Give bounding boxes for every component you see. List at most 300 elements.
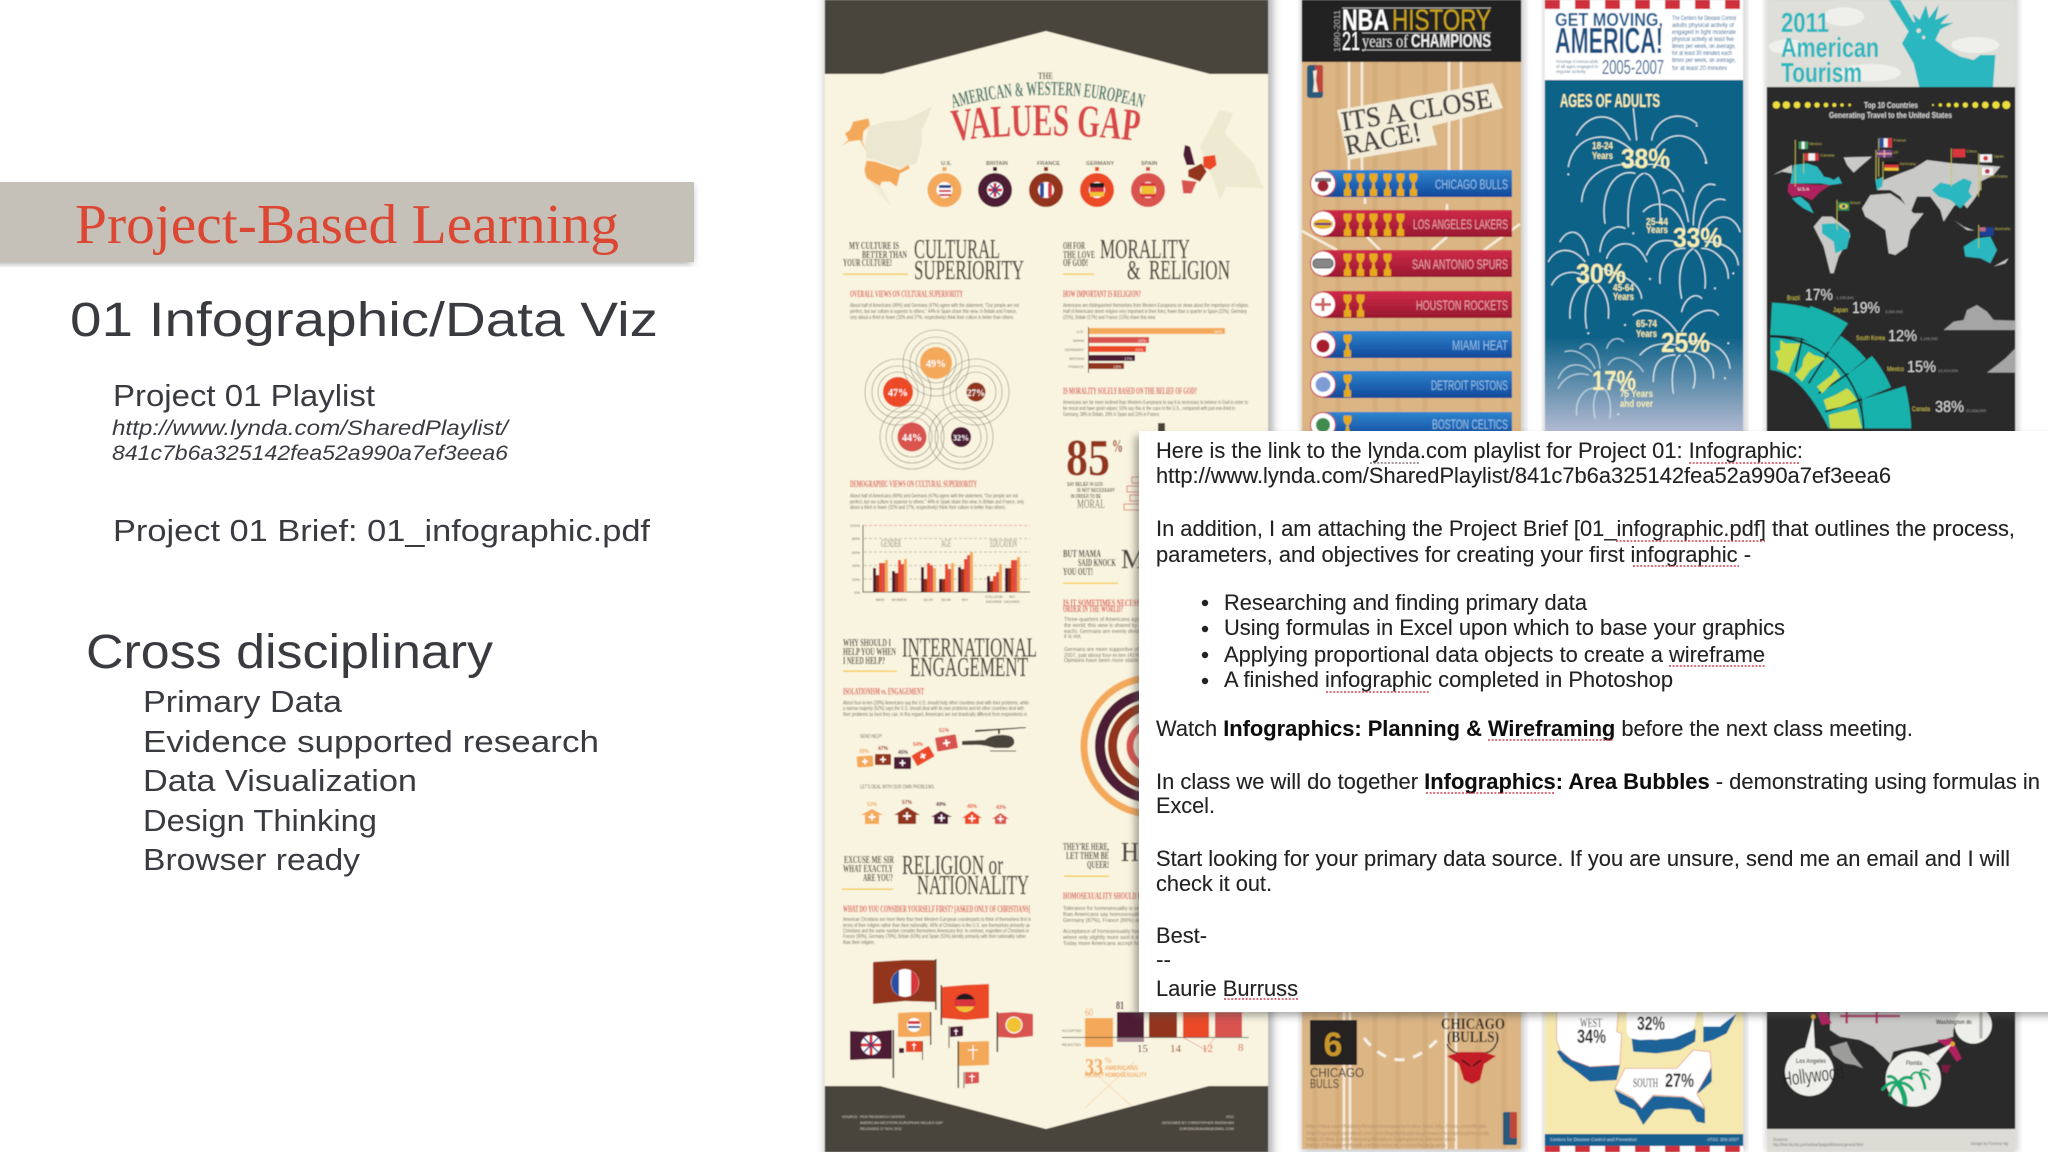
infographic: send help suitcases: 39% <box>859 749 870 755</box>
chart: acceptance bars: ACCEPTED <box>1062 1029 1082 1033</box>
bullet list: Using formulas in Excel upon which to base your graphics <box>1224 615 1785 640</box>
team: Spurs: SAN ANTONIO SPURS <box>1412 256 1508 272</box>
poster header: engaged in light moderate <box>1672 30 1737 36</box>
email text: Excel. <box>1156 793 1215 818</box>
bulls label: (BULLS) <box>1447 1029 1499 1046</box>
flags illustration <box>850 959 1033 1088</box>
poster footer: RELEASED 17 NOV 2011 <box>860 1127 902 1131</box>
section: morality heading: & RELIGION <box>1127 255 1230 285</box>
map labels: Florida <box>1906 1061 1923 1067</box>
chart: demographic bars: 100% <box>850 523 860 528</box>
section: international engagement heading: ENGAGEMENT <box>910 652 1028 682</box>
email text: In addition, I am attaching the Project Brief [01_infographic.pdf] that outlines the process, <box>1156 516 2015 541</box>
map labels <box>1781 1020 1973 1091</box>
text: isolationism: their problems as best they can. In this regard, Americans are not drastically different from respondents in <box>843 712 1027 718</box>
team: Pistons: DETROIT PISTONS <box>1431 377 1508 393</box>
chart: demographic bars: DEGREE <box>1004 600 1020 604</box>
poster header: adults physical activity of <box>1672 23 1734 29</box>
section: homosexuality heading: HO <box>1121 837 1157 867</box>
fireworks background: AGES OF ADULTS <box>1560 91 1660 111</box>
chart: acceptance bars <box>1062 998 1249 1108</box>
stat: ages percentages: 25% <box>1661 327 1710 358</box>
section: moral authority heading <box>1063 544 1164 664</box>
chart: religion importance bars: 22% <box>1138 339 1147 343</box>
poster footer: AMERICAN-WESTERN EUROPEAN VALUES GAP <box>860 1121 943 1125</box>
stat: region percentages: 27% <box>1665 1071 1694 1092</box>
text block: project heading <box>70 294 658 548</box>
section: homosexuality heading: Germany (87%), France (86%) and Britain ( <box>1063 918 1164 924</box>
section: international engagement heading: WHY SHOULD I <box>843 637 891 649</box>
poster header: for at least 30 minutes each <box>1672 51 1732 57</box>
poster header: 2005-2007 <box>1602 57 1664 79</box>
infographic: send help suitcases: 51% <box>939 728 950 734</box>
dots heading: Generating Travel to the United States <box>1829 111 1952 120</box>
chart: demographic bars: About half of Americans (49%) and Germans (47%) agree with the statement, "Our people are not <box>850 494 1018 500</box>
stat: country shares: 1,145,841 <box>1836 295 1855 300</box>
text: what consider first: than their religion. <box>843 940 875 946</box>
text: overall views <box>850 289 1019 321</box>
section: religion or nationality heading: NATIONALITY <box>917 870 1029 900</box>
chart: acceptance bars: 15 <box>1137 1043 1148 1055</box>
chart: demographic bars: 40% <box>852 563 860 568</box>
section: cultural superiority heading: SUPERIORITY <box>914 255 1024 285</box>
stat: ages percentages: 33% <box>1673 222 1722 253</box>
chart: demographic bars: DEMOGRAPHIC VIEWS ON CULTURAL SUPERIORITY <box>850 479 977 489</box>
stat: 85 percent <box>1066 430 1142 511</box>
poster title: Tourism <box>1781 57 1862 88</box>
banner title: Project-Based Learning <box>75 194 619 256</box>
team: Celtics <box>1310 412 1512 439</box>
panel: american tourism poster <box>1767 0 2017 1152</box>
email text: Best- <box>1156 923 1207 948</box>
stat: ages percentages: Years <box>1592 151 1613 162</box>
chart: demographic bars: 80% <box>852 536 860 541</box>
text block: cross disciplinary: Evidence supported research <box>143 724 599 759</box>
text: how important is religion: HOW IMPORTANT IS RELIGION? <box>1063 289 1141 299</box>
chart: religion importance bars: 21% <box>1135 348 1144 352</box>
chart: culture rings: 49% <box>926 359 946 370</box>
text: isolationism: a narrow majority (52%) says the U.S. should deal with its own problems and let other countries deal with <box>843 706 1024 712</box>
infographic: own problems houses: 49% <box>936 802 947 808</box>
USA destinations map <box>1785 1006 1992 1107</box>
email text: http://www.lynda.com/SharedPlaylist/841c7b6a325142fea52a990a7ef3eea6 <box>1156 463 1891 488</box>
team: Pistons <box>1310 371 1512 398</box>
chart: target rings <box>1084 678 1220 814</box>
text block: cross disciplinary <box>86 626 599 877</box>
close race paper note <box>1337 83 1503 162</box>
email text <box>1156 438 2040 1001</box>
fine print: http://sportsillustrated.cnn.com/basketball/nba/news/champions/records <box>1306 1131 1489 1137</box>
fine print <box>1306 1124 1489 1149</box>
stat: 85 percent: IN ORDER TO BE <box>1071 494 1101 500</box>
infographic: send help suitcases <box>857 728 958 769</box>
stat: 85 percent: SAY BELIEF IN GOD <box>1067 482 1103 488</box>
poster footer: CHRISINGRAHAM@GMAIL.COM <box>1179 1127 1234 1131</box>
bulls label <box>1310 1016 1505 1091</box>
infographic: send help suitcases: 54% <box>913 742 924 748</box>
chart: demographic bars: COLLEGE <box>985 595 1003 599</box>
section: moral authority heading: Germans are more supportive of the use of <box>1064 647 1163 653</box>
stat: country shares: South Korea <box>1856 336 1886 342</box>
stat: country shares: 13,414,000 <box>1938 368 1959 373</box>
stat: region percentages: 34% <box>1577 1027 1606 1048</box>
stat: ages percentages: 17% <box>1592 365 1636 396</box>
section: moral authority heading: Three-quarters of Americans agree that it <box>1064 617 1159 623</box>
team: Celtics: BOSTON CELTICS <box>1432 416 1508 432</box>
poster header <box>1545 9 1743 80</box>
fine print: http://nba.com/history/finals/champions/index.html http://nba.com/finals <box>1306 1124 1486 1130</box>
chart: religion importance bars: FRANCE <box>1068 365 1084 369</box>
map: europe <box>1182 110 1263 200</box>
section: homosexuality heading: Acceptance of homosexuality has increased <box>1063 929 1164 935</box>
chart: religion importance bars <box>1065 327 1225 373</box>
stat: country shares <box>1787 287 1987 416</box>
section: homosexuality heading: QUEER! <box>1087 859 1109 871</box>
stat: ages percentages: 38% <box>1621 143 1670 174</box>
text block: project heading: Project 01 Playlist <box>113 378 375 413</box>
world map: France <box>1894 138 1907 143</box>
poster header: for at least 20 minutes <box>1672 66 1727 72</box>
stat: region percentages: WEST <box>1580 1015 1602 1030</box>
section: homosexuality heading <box>1063 837 1164 947</box>
map labels: Washington dc <box>1936 1020 1973 1026</box>
stat: region percentages <box>1577 1014 1694 1092</box>
stat: ages percentages: 25-44 <box>1646 217 1668 228</box>
email text: Laurie Burruss <box>1156 976 1298 1001</box>
world map: Germany <box>1900 161 1916 166</box>
chart: demographic bars: 50+ <box>962 598 969 602</box>
section: moral authority heading: it is not. <box>1064 634 1082 640</box>
poster footer: DESIGNED BY CHRISTOPHER INGRAHAM <box>1162 1121 1234 1125</box>
bullet list: Applying proportional data objects to create a wireframe <box>1224 642 1765 667</box>
world map: Australia <box>1995 226 2011 231</box>
email text: In class we will do together Infographics: Area Bubbles - demonstrating using formulas in <box>1156 769 2040 794</box>
chart: acceptance bars: REJECTED <box>1062 1043 1081 1047</box>
text: overall views: About half of Americans (49%) and Germans (47%) agree with the statement, "Our people are not <box>850 303 1019 309</box>
chart: acceptance bars: % <box>1105 1056 1112 1065</box>
poster title: AMERICAN & WESTERN EUROPEAN <box>952 81 1146 108</box>
section: homosexuality heading: Today more Americans accept homosexual <box>1063 941 1162 947</box>
chart: religion importance bars: BRITAIN <box>1069 357 1084 361</box>
text: isolationism <box>843 686 1029 718</box>
chart: acceptance bars: 12 <box>1202 1043 1213 1055</box>
team: Rockets <box>1310 291 1512 318</box>
infographic: own problems houses: LET'S DEAL WITH OUR OWN PROBLEMS <box>860 784 935 790</box>
email text: Watch Infographics: Planning & Wireframing before the next class meeting. <box>1156 716 1913 741</box>
text: morality belief: Americans are far more inclined than Western Europeans to say it is necessary to believe in God in order to <box>1063 400 1248 406</box>
world map: UK <box>1893 149 1899 154</box>
poster title: 2011 <box>1781 7 1829 38</box>
close race paper note: RACE! <box>1342 117 1424 162</box>
lakers scoreboard <box>1310 1020 1357 1065</box>
team: Spurs <box>1310 250 1512 277</box>
world map: Canada <box>1820 153 1835 158</box>
stat: ages percentages: Years <box>1613 292 1634 303</box>
team: Chicago Bulls <box>1310 170 1512 197</box>
stat: country shares: 12% <box>1888 328 1917 345</box>
poster footer <box>825 1086 1268 1152</box>
text: how important is religion: Half of Americans deem religion very important in their lives; fewer than a quarter in Spain (22%), Germany <box>1063 309 1247 315</box>
section: moral authority heading: SAID KNOCK <box>1078 557 1116 569</box>
text: how important is religion <box>1063 289 1249 321</box>
poster footer: PEW RESEARCH CENTER <box>860 1115 905 1119</box>
poster header: AMERICA! <box>1555 20 1663 61</box>
stat: 85 percent: MORAL <box>1077 496 1105 511</box>
stat: country shares: 17% <box>1805 287 1833 304</box>
world map: South Korea <box>1985 174 2008 179</box>
text: overall views: perfect, but our culture is superior to others." 44% in Spain share this view. In Britain and France, <box>850 309 1017 315</box>
bullet list: A finished infographic completed in Photoshop <box>1224 667 1673 692</box>
panel: NBA history poster <box>1302 0 1524 1152</box>
stat: country shares: Japan <box>1833 308 1848 314</box>
text block: project heading: Project 01 Brief: 01_infographic.pdf <box>113 513 650 548</box>
text block: cross disciplinary: Design Thinking <box>143 803 377 838</box>
stat: ages percentages: 18-24 <box>1592 141 1613 152</box>
text block: cross disciplinary: Primary Data <box>143 684 343 719</box>
text: isolationism: About four-in-ten (39%) Americans say the U.S. should help other countries deal with their problems, while <box>843 700 1029 706</box>
chart: demographic bars: MEN <box>876 598 884 602</box>
poster footer <box>1545 1134 1743 1152</box>
country badges <box>928 161 1165 207</box>
stat: ages percentages <box>1576 141 1722 410</box>
chart: demographic bars: WOMEN <box>892 598 907 602</box>
poster header: times per week, on average, <box>1672 44 1736 50</box>
poster title <box>950 71 1146 142</box>
section: international engagement heading: INTERNATIONAL <box>902 632 1037 662</box>
chart: demographic bars: perfect, but our culture is superior to others." 44% in Spain share this view. In Britain and France, only <box>850 500 1024 506</box>
country badges: GERMANY <box>1086 161 1114 167</box>
chart: religion importance bars: U.S. <box>1077 330 1084 334</box>
section: moral authority heading: ORDER IN THE WORLD? <box>1063 604 1123 614</box>
panel: email message <box>1135 431 2048 1016</box>
lakers scoreboard: 6 <box>1324 1026 1342 1064</box>
section: cultural superiority heading <box>843 234 1024 285</box>
text: how important is religion: (21%), Britain (17%) and France (13%) share this view. <box>1063 315 1156 321</box>
text: morality belief <box>1063 386 1248 432</box>
stat: 85 percent: IS NOT NECESSARY <box>1077 488 1116 494</box>
NBA header: NBA <box>1342 4 1389 37</box>
text: morality belief: IS MORALITY SOLELY BASED ON THE BELIEF OF GOD? <box>1063 386 1197 396</box>
team: Chicago Bulls: CHICAGO BULLS <box>1435 176 1508 192</box>
chart: demographic bars: 18-29 <box>923 598 933 602</box>
NBA header: CHAMPIONS <box>1411 31 1491 51</box>
chart: demographic bars: DEGREE <box>986 600 1002 604</box>
infographic: own problems houses: 57% <box>902 800 913 806</box>
poster footer: Source: <box>1773 1137 1789 1142</box>
text block: project heading: http://www.lynda.com/SharedPlaylist/ <box>112 417 510 440</box>
text: morality belief: Germany, 38% in Britain, 19% in Spain and 15% in France. <box>1063 412 1160 418</box>
email text: check it out. <box>1156 871 1272 896</box>
banner <box>0 182 694 263</box>
map: north america <box>841 107 932 207</box>
section: homosexuality heading: where only slightly more said it should be a <box>1063 935 1162 941</box>
poster title <box>1781 7 1879 88</box>
text: what consider first: France (90%), Germany (70%), Britain (63%) and Spain (53%) identify primarily with their nationality rather <box>843 934 1026 940</box>
world map: U.S.A <box>1798 187 1810 192</box>
chart: culture rings <box>865 330 1009 469</box>
section: morality heading <box>1063 234 1230 285</box>
section: religion or nationality heading: ARE YOU? <box>863 872 893 884</box>
poster footer: ATSC 300-2007 <box>1707 1137 1739 1142</box>
chart: demographic bars <box>850 479 1030 604</box>
section: international engagement heading: I NEED HELP? <box>843 655 885 667</box>
text block: cross disciplinary: Cross disciplinary <box>86 626 493 679</box>
bullet list: Researching and finding primary data <box>1224 590 1587 615</box>
regional map <box>1545 1012 1743 1134</box>
world map: Brazil <box>1850 200 1860 205</box>
stat: country shares: Brazil <box>1787 296 1800 302</box>
chart: religion importance bars: GERMANY <box>1065 348 1084 352</box>
NBA header: 21 <box>1342 26 1360 56</box>
chart: demographic bars: EDUCATION <box>990 536 1017 550</box>
stat: country shares: Mexico <box>1887 367 1905 373</box>
chart: acceptance bars: 8 <box>1238 1042 1244 1054</box>
infographic: send help suitcases: SEND HELP! <box>860 734 882 740</box>
team: Lakers: LOS ANGELES LAKERS <box>1413 216 1508 232</box>
bullet list <box>1202 590 1785 692</box>
section: cultural superiority heading: CULTURAL <box>914 234 1000 264</box>
section: homosexuality heading: LET THEM BE <box>1066 850 1109 862</box>
poster title: VALUES GAP <box>950 104 1141 142</box>
icon: NBA logo <box>1307 65 1323 98</box>
NBA header: years of <box>1362 31 1408 51</box>
text: what consider first <box>843 904 1031 946</box>
world map: China <box>1966 149 1978 154</box>
section: cultural superiority heading: MY CULTURE IS <box>849 240 899 252</box>
text block: cross disciplinary: Browser ready <box>143 842 361 877</box>
section: cultural superiority heading: BETTER THAN <box>862 249 907 261</box>
world map: Mexico <box>1809 141 1822 146</box>
text: morality belief: be moral and have good values; 53% say this is the case in the U.S., compared with just one-third in <box>1063 406 1235 412</box>
team: Heat <box>1310 331 1512 358</box>
stat: ages percentages: 75 Years <box>1620 389 1653 400</box>
court lines <box>1302 62 1520 1149</box>
section: homosexuality heading: THEY'RE HERE, <box>1063 841 1109 853</box>
icon: statue of liberty <box>1889 0 1995 87</box>
text block: project heading: 841c7b6a325142fea52a990a7ef3eea6 <box>112 442 508 465</box>
team: Lakers <box>1310 210 1512 237</box>
stat: country shares: 15% <box>1907 359 1936 376</box>
text block: project heading: 01 Infographic/Data Viz <box>70 294 658 347</box>
poster header: physical activity at least five <box>1672 37 1735 43</box>
infographic: own problems houses: 45% <box>967 804 978 810</box>
chart: acceptance bars: REJECT HOMOSEXUALITY <box>1085 1073 1147 1079</box>
team: Heat: MIAMI HEAT <box>1452 337 1508 353</box>
section: morality heading: THE LOVE <box>1063 249 1095 261</box>
poster title: American <box>1781 32 1879 63</box>
poster header: The Centers for Disease Control <box>1672 16 1736 22</box>
dots heading: Top 10 Countries <box>1864 101 1918 110</box>
clouds <box>1944 305 2015 373</box>
chart: acceptance bars: 81 <box>1116 998 1124 1012</box>
section: moral authority heading: Opinions have been more stable in the U.S. <box>1064 658 1164 664</box>
text: overall views: OVERALL VIEWS ON CULTURAL SUPERIORITY <box>850 289 963 299</box>
chart: religion importance bars: 50% <box>1214 330 1223 334</box>
stat: country shares: 3,250,000 <box>1885 309 1904 314</box>
panel: get moving poster <box>1545 0 1745 1152</box>
infographic: send help suitcases: 47% <box>878 746 889 752</box>
stat: country shares: 1,145,000 <box>1920 336 1939 341</box>
section: moral authority heading: each). Germans are evenly divided, with ha <box>1064 629 1164 635</box>
chart: acceptance bars: 33 <box>1085 1055 1103 1081</box>
stat: ages percentages: 45-64 <box>1613 283 1634 294</box>
panel: values gap poster <box>820 0 1278 1152</box>
email text: parameters, and objectives for creating your first infographic - <box>1156 542 1751 567</box>
chart: demographic bars: AGE <box>941 536 951 550</box>
country badges: U.S. <box>941 161 952 167</box>
poster header: Percentage of American adults <box>1556 59 1599 64</box>
section: morality heading: OF GOD! <box>1063 257 1088 269</box>
country badges: BRITAIN <box>986 161 1008 167</box>
country badges: SPAIN <box>1141 161 1157 167</box>
poster header: regular activity <box>1556 69 1587 74</box>
chart: religion importance bars: SPAIN <box>1073 339 1084 343</box>
chart: culture rings: 44% <box>902 433 922 444</box>
poster footer: Centers for Disease Control and Prevention <box>1550 1137 1638 1142</box>
NBA header: 1990-2011 <box>1333 9 1342 52</box>
section: morality heading: OH FOR <box>1063 240 1086 252</box>
NBA header <box>1302 0 1521 62</box>
section: international engagement heading <box>843 632 1037 682</box>
map labels: Los Angeles <box>1796 1059 1827 1065</box>
section: moral authority heading: the world; this view is shared by seven-in <box>1064 623 1158 629</box>
map labels: Hollywood <box>1781 1062 1845 1091</box>
poster footer: Design by Florence Ng <box>1971 1141 2008 1146</box>
team bars <box>1310 170 1512 439</box>
world map: Japan <box>1993 153 2004 158</box>
chart: demographic bars: 30-49 <box>941 598 951 602</box>
stat: ages percentages: 65-74 <box>1636 319 1657 330</box>
chart: radial travel share <box>1770 303 1911 428</box>
stat: region percentages: 32% <box>1637 1014 1665 1035</box>
section: international engagement heading: HELP YOU WHEN <box>843 646 896 658</box>
poster footer: http://tinet.ita.doc.gov/outreachpages/inbound.general.html <box>1773 1142 1863 1147</box>
text: what consider first: Christians and the same number consider themselves Americans first. In contrast, majorities of Christians in <box>843 928 1029 934</box>
chart: religion importance bars: 13% <box>1113 365 1122 369</box>
NBA header: HISTORY <box>1392 4 1491 37</box>
poster footer: 2012 <box>1226 1115 1234 1119</box>
icon: helicopter <box>962 727 1026 751</box>
poster header: GET MOVING, <box>1555 10 1663 30</box>
spell-check underlines <box>1224 463 1800 999</box>
poster header: times per week, on average, <box>1672 58 1736 64</box>
stat: country shares: 38% <box>1935 399 1964 416</box>
section: moral authority heading: IS IT SOMETIMES NECESSARY <box>1063 598 1153 608</box>
poster header band <box>825 0 1268 74</box>
section: moral authority heading: YOU OUT! <box>1063 566 1093 578</box>
poster footer <box>1767 1129 2015 1152</box>
email text: -- <box>1156 947 1171 972</box>
chart: religion importance bars: 17% <box>1124 357 1133 361</box>
stat: ages percentages: Years <box>1646 225 1668 236</box>
email text: Here is the link to the lynda.com playlist for Project 01: Infographic: <box>1156 438 1803 463</box>
text: how important is religion: Americans are distinguished themselves from Western Europeans on views about the importance of religion. <box>1063 303 1249 309</box>
chart: demographic bars: 0% <box>854 590 860 595</box>
close race paper note: ITS A CLOSE <box>1339 84 1494 138</box>
poster title: THE <box>1038 71 1053 81</box>
chart: culture rings: 47% <box>888 388 908 399</box>
icon: NBA logo small <box>1503 1112 1517 1145</box>
text: what consider first: American Christians are more likely than their Western European counterparts to think of themselves first in <box>843 917 1031 923</box>
icon: bull head <box>1447 1044 1496 1084</box>
fine print: http://basketball-reference.com/leagues <box>1306 1143 1446 1149</box>
fine print: http://nba.com/history/finals/champions.html/index <box>1306 1137 1456 1143</box>
chart: culture rings: 27% <box>967 388 985 398</box>
section: moral authority heading: M <box>1121 544 1145 574</box>
section: religion or nationality heading: RELIGION or <box>902 850 1003 880</box>
chart: acceptance bars: AMERICANS <box>1105 1066 1138 1072</box>
stat: ages percentages: 30% <box>1576 258 1626 289</box>
